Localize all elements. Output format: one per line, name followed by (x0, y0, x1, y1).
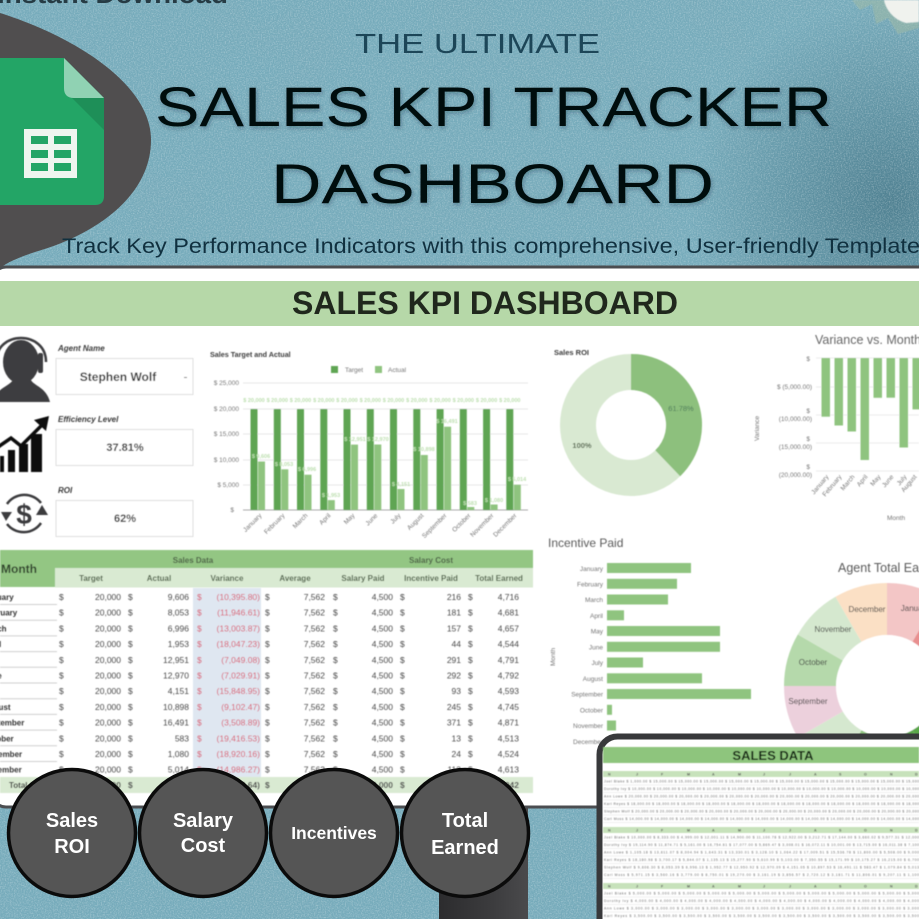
chart: incentive paid: October (580, 708, 604, 714)
chart: sales target and actual: September (421, 512, 449, 540)
tablet spreadsheet rows: Dorothy Ivy $ 10,000.00 $ 10,000.00 $ 10,000.00 $ 10,000.00 $ 10,000.00 $ 10,000.00 $ 10,000.00 $ 10,000.00 $ 10,000.00 $ 10,000.00 $ 10,000.00 $ 10,000 (604, 787, 919, 791)
table: sales and salary data: 57,042 (493, 780, 519, 790)
table: sales and salary data: 4,745 (498, 702, 519, 712)
chart: sales target and actual: $ 12,970 (367, 437, 389, 443)
panel: monitor screen (0, 267, 919, 807)
table: sales and salary data: $$$$$$ (59, 780, 473, 790)
dashboard header band (0, 281, 919, 326)
tablet spreadsheet rows: Joel Blake $ 5,000.00 $ 5,000.00 $ 5,000.00 $ 5,000.00 $ 5,000.00 $ 5,000.00 $ 5,000.00 $ 5,000.00 $ 5,000.00 $ 5,000.00 $ 5,000.00 $ 5,000 (604, 892, 919, 896)
label: efficiency level: Efficiency Level (58, 415, 119, 424)
chart: sales target and actual: $ 20,000 (290, 398, 311, 404)
tablet spreadsheet rows: NJFMAMJJASOND (608, 828, 918, 832)
chart: sales target and actual: $ 20,000 (476, 398, 497, 404)
chart: incentive paid: December (573, 739, 604, 746)
chart: incentive paid: Month (550, 648, 557, 666)
table: sales and salary data: 4,657 (498, 623, 519, 633)
table: sales and salary data: 4,500 (372, 623, 393, 633)
tablet spreadsheet rows: NJFMAMJJASOND (608, 772, 918, 776)
roi value box (56, 500, 193, 536)
tablet device (600, 736, 919, 919)
chart: sales target and actual: $ 12,951 (344, 437, 366, 443)
table: sales and salary data: $ (197, 749, 202, 759)
table: sales and salary data: $$$$$$ (59, 608, 473, 618)
badge: incentives: Incentives (291, 823, 377, 843)
tablet spreadsheet rows: Dorothy Ivy $ 4,000.00 $ 4,000.00 $ 4,000.00 $ 4,000.00 $ 4,000.00 $ 4,000.00 $ 4,000.00 $ 4,000.00 $ 4,000.00 $ 4,000.00 $ 4,000.00 $ 4,000 (604, 899, 919, 903)
table: sales and salary data: (13,003.87) (217, 623, 260, 633)
table: sales and salary data: 371 (447, 718, 461, 728)
table: sales and salary data: 7,562 (304, 702, 325, 712)
chart: agent total earned donut: September (788, 697, 828, 706)
chart: sales target and actual: $ 20,000 (499, 398, 521, 404)
chart: variance vs month: April (856, 473, 870, 488)
chart: sales target and actual: $ 1,080 (485, 498, 503, 504)
table: sales and salary data: $ (197, 718, 202, 728)
table: sales and salary data: $$$$$$ (59, 686, 473, 696)
table: sales and salary data: 4,500 (372, 718, 393, 728)
table: sales and salary data: 4,500 (372, 686, 393, 696)
chart: sales target and actual: $ 15,000 (214, 431, 239, 438)
table: sales and salary data: 4,500 (372, 655, 393, 665)
table: sales and salary data: $$$$$$ (59, 655, 473, 665)
chart: sales target and actual: $ 20,000 (360, 398, 381, 404)
tablet spreadsheet rows: Ann Lowe $ 20,000.00 $ 20,000.00 $ 20,000.00 $ 20,000.00 $ 20,000.00 $ 20,000.00 $ 20,000.00 $ 20,000.00 $ 20,000.00 $ 20,000.00 $ 20,000.00 $ 20,000 (604, 794, 919, 798)
table: sales and salary data: 4,513 (498, 733, 519, 743)
badge: total earned (402, 770, 528, 896)
table: sales and salary data: 1,080 (168, 749, 189, 759)
title: the ultimate: THE ULTIMATE (355, 28, 600, 59)
chart: variance vs month: $ (806, 464, 810, 471)
chart: sales target and actual: $ 5,000 (217, 482, 239, 489)
table: sales and salary data: 4,500 (372, 702, 393, 712)
table: sales and salary data: 7,562 (304, 608, 325, 618)
table: sales and salary data: $$$$$$ (59, 623, 473, 633)
table: sales and salary data: 44 (452, 639, 461, 649)
efficiency value box: 37.81% (106, 442, 144, 454)
table: sales and salary data: (10,395.80) (217, 592, 260, 602)
agent name dropdown (56, 358, 193, 394)
table: sales and salary data: 12,970 (163, 670, 189, 680)
chart: agent total earned donut: October (799, 658, 828, 667)
badge: salary cost (140, 770, 266, 896)
chart: sales target and actual: $ 20,000 (406, 398, 428, 404)
table: sales and salary data: Month (1, 562, 37, 576)
chart: variance vs month: March (840, 473, 857, 492)
label: agent name: Agent Name (57, 344, 105, 353)
tablet spreadsheet rows: Stephen Wolf $ 9,606.30 $ 8,053.39 $ 6,996.13 $ 1,952.77 $ 12,950.92 $ 12,970.09 $ 4,151.05 $ 10,897.53 $ 16,491.11 $ 583.47 $ 1,079.84 $ 5,013 (604, 866, 919, 870)
chart: variance vs month: May (869, 473, 883, 488)
table: sales and salary data: $ (197, 639, 202, 649)
table: sales and salary data: Variance (211, 574, 244, 583)
chart: sales roi donut: 100% (572, 441, 592, 450)
table: sales and salary data: $$$$$$ (59, 749, 473, 759)
chart: sales target and actual: $ 20,000 (267, 398, 288, 404)
chart: variance vs month: February (821, 473, 844, 498)
table: sales and salary data: 7,562 (304, 765, 325, 775)
chart: sales target and actual: $ 8,053 (275, 462, 293, 468)
table: sales and salary data: 4,681 (498, 608, 519, 618)
label: roi: ROI (58, 486, 73, 495)
chart: sales target and actual: $ 9,606 (252, 454, 270, 460)
table: sales and salary data: 9,606 (168, 592, 189, 602)
title: dashboard: DASHBOARD (271, 152, 714, 215)
chart: sales target and actual: $ 20,000 (313, 398, 335, 404)
table: sales and salary data: 291 (447, 655, 461, 665)
table: sales and salary data: 20,000 (95, 733, 121, 743)
chart: sales target and actual: $ 16,491 (436, 419, 458, 425)
chart: variance vs month: (15,000.00) (779, 444, 812, 451)
table: sales and salary data: 4,151 (168, 686, 189, 696)
table: sales and salary data: (19,416.53) (217, 733, 260, 743)
table: sales and salary data: 20,000 (95, 608, 121, 618)
chart: incentive paid: June (589, 644, 603, 652)
chart: sales target and actual: January (242, 512, 264, 534)
table: sales and salary data: $$$$$$ (59, 639, 473, 649)
table: sales and salary data: 245 (447, 702, 461, 712)
badge: total earned: Total (442, 810, 488, 832)
table: sales and salary data: 24 (452, 749, 461, 759)
table: sales and salary data: 4,544 (498, 639, 519, 649)
chart: sales target and actual: August (406, 512, 426, 532)
table: sales and salary data: 90,746 (299, 780, 325, 790)
table: sales and salary data: 7,562 (304, 623, 325, 633)
table: sales and salary data: Average (279, 574, 311, 583)
table: sales and salary data: 4,500 (372, 765, 393, 775)
table: sales and salary data: Target (79, 574, 103, 583)
chart: sales target and actual: July (389, 512, 403, 526)
chart: sales target and actual: December (492, 512, 519, 539)
chart: incentive paid: Incentive Paid (548, 536, 623, 550)
table: sales and salary data: 20,000 (95, 702, 121, 712)
table: sales and salary data: 4,791 (498, 655, 519, 665)
table: sales and salary data: 20,000 (95, 592, 121, 602)
grey badge behind spreadsheet icon (0, 13, 151, 268)
tablet spreadsheet rows: Dorothy Ivy $ 19,114.90 $ 11,874.71 $ 5,161.00 $ 16,754.61 $ 17,077.00 $ 5,869.47 $ 3,008.01 $ 16,072.11 $ 10,001.00 $ 13,715.00 $ 16,011.38 $ 7,100 (604, 843, 919, 847)
chart: variance vs month (754, 333, 919, 522)
table: sales and salary data: 20,000 (95, 655, 121, 665)
table: sales and salary data: 12,951 (163, 655, 189, 665)
table: sales and salary data: 7,562 (304, 718, 325, 728)
sales data header band (603, 747, 919, 763)
chart: agent total earned donut: December (849, 605, 886, 614)
chart: incentive paid (548, 536, 751, 746)
chart: sales target and actual: March (292, 512, 310, 530)
icon: flower corner decoration (852, 0, 919, 34)
icon: agent with headset (0, 338, 50, 402)
badge: salary cost: Cost (181, 835, 226, 857)
table: sales and salary data: 4,792 (498, 670, 519, 680)
table: sales and salary data: 20,000 (95, 718, 121, 728)
chart: variance vs month: $ (5,000.00) (777, 384, 812, 391)
chart: incentive paid: July (591, 660, 604, 667)
chart: sales target and actual: $ 20,000 (214, 406, 239, 413)
table: sales and salary data: 181 (447, 608, 461, 618)
icon: growth chart (0, 416, 49, 472)
chart: variance vs month: $ (806, 356, 810, 363)
table: sales and salary data: 90,746 (163, 780, 189, 790)
chart: incentive paid: May (591, 628, 604, 636)
chart: variance vs month: (10,000.00) (779, 416, 812, 423)
table: sales and salary data: (15,848.95) (217, 686, 260, 696)
table: sales and salary data: 7,562 (304, 655, 325, 665)
chart: agent total earned donut: November (815, 625, 852, 634)
table: sales and salary data: 1,953 (168, 639, 189, 649)
chart: sales target and actual: October (451, 512, 473, 534)
chart: sales target and actual: $ 20,000 (453, 398, 474, 404)
chart: incentive paid: September (571, 692, 604, 698)
tablet spreadsheet rows: Joel Blake $ 1,000.00 $ 15,000.00 $ 15,000.00 $ 15,000.00 $ 15,000.00 $ 15,000.00 $ 15,000.00 $ 15,000.00 $ 15,000.00 $ 15,000.00 $ 15,000.00 $ 15,000 (604, 780, 919, 784)
chart: sales target and actual: $ (230, 507, 234, 514)
table: sales and salary data: (3,508.89) (221, 718, 260, 728)
chart: incentive paid: March (585, 597, 603, 604)
table: sales and salary data: $ (197, 733, 202, 743)
tablet spreadsheet rows: Karl Reyes $ 18,000.00 $ 18,000.00 $ 18,000.00 $ 18,000.00 $ 18,000.00 $ 18,000.00 $ 18,000.00 $ 18,000.00 $ 18,000.00 $ 18,000.00 $ 18,000.00 $ 18,000 (604, 802, 919, 806)
chart: sales target and actual: April (318, 512, 333, 527)
table: sales and salary data: 4,716 (498, 592, 519, 602)
table: sales and salary data: $$$$$$ (59, 765, 473, 775)
table: sales and salary data: 10,898 (163, 702, 189, 712)
chart: sales target and actual: $ 20,000 (429, 398, 451, 404)
table: sales and salary data: (18,047.23) (217, 639, 260, 649)
badge: sales roi: Sales (46, 810, 98, 832)
table: sales and salary data: 7,562 (304, 670, 325, 680)
chart: sales target and actual: $ 20,000 (336, 398, 358, 404)
table: sales and salary data: (7,049.08) (221, 655, 260, 665)
table: sales and salary data: $$$$$$ (59, 733, 473, 743)
tablet spreadsheet rows: Joel Blake $ 10,000.00 $ 8,333.00 $ 4,999.00 $ 12,001.11 $ 14,900.00 $ 11,100.78 $ 12,922.00 $ 3,212.71 $ 17,144.00 $ 3,660.02 $ 9,577.31 $ 12,000 (604, 836, 919, 840)
tablet spreadsheet rows: Carl Moss $ 5,971.15 $ 3,560.16 $ 3,779.00 $ 8,750.01 $ 19,270.00 $ 3,161.19 $ 3,856.57 $ 2,720.12 $ 3,181.71 $ 11,806.01 $ 9,207.11 $ 1,100 (604, 873, 919, 877)
chart: variance vs month: $ (806, 436, 810, 443)
chart: sales target and actual: $ 25,000 (214, 380, 239, 387)
table: sales and salary data: (11,946.61) (217, 608, 260, 618)
table: sales and salary data: Incentive Paid (404, 574, 458, 583)
table: sales and salary data: 54,000 (367, 780, 393, 790)
chart: incentive paid: April (590, 613, 604, 620)
chart: sales roi donut: Sales ROI (554, 348, 589, 357)
table: sales and salary data: (149,253.64) (212, 780, 260, 790)
chart: sales target and actual: $ 10,898 (413, 447, 435, 453)
chart: sales target and actual: $ 6,996 (298, 467, 316, 473)
chart: sales target and actual: $ 20,000 (243, 398, 265, 404)
sales data header band: SALES DATA (732, 748, 814, 763)
table: sales and salary data: $ (197, 765, 202, 775)
table: sales and salary data: (9,102.47) (221, 702, 260, 712)
table: sales and salary data: 4,871 (498, 718, 519, 728)
table: sales and salary data: Salary Cost (409, 556, 453, 565)
roi value box: 62% (114, 513, 136, 525)
tablet spreadsheet rows: Ann Lowe $ 3,000.00 $ 3,000.00 $ 3,000.00 $ 3,000.00 $ 3,000.00 $ 3,000.00 $ 3,000.00 $ 3,000.00 $ 3,000.00 $ 3,000.00 $ 3,000.00 $ 3,000 (604, 906, 919, 910)
tablet spreadsheet rows: Ann Lowe $ 1,105.18 $ 13,611.07 $ 8,004.94 $ 1,643.31 $ 13,330.01 $ 3,128.10 $ 1,064.22 $ 17,009.51 $ 15,536.78 $ 11,800.00 $ 5,508.00 $ 9,000 (604, 850, 919, 854)
table: sales and salary data: 93 (452, 686, 461, 696)
chart: variance vs month: January (810, 473, 831, 496)
icon: dollar cycle (1, 495, 48, 532)
tablet spreadsheet rows: Karl Reyes $ 3,500.00 $ 3,500.00 $ 3,500.00 $ 3,500.00 $ 3,500.00 $ 3,500.00 $ 3,500.00 $ 3,500.00 $ 3,500.00 $ 3,500.00 $ 3,500.00 $ 3,500 (604, 914, 919, 918)
chart: variance vs month: $ (806, 408, 810, 415)
table: sales and salary data: 20,000 (95, 623, 121, 633)
chart: sales target and actual: $ 5,014 (508, 477, 527, 483)
table: sales and salary data: 7,562 (304, 733, 325, 743)
table: sales and salary data: 20,000 (95, 749, 121, 759)
chart: variance vs month: Variance (754, 415, 761, 441)
chart: incentive paid: January (580, 566, 604, 573)
table: sales and salary data: 292 (447, 670, 461, 680)
chart: sales target and actual: $ 10,000 (214, 457, 239, 464)
table header bands (0, 550, 533, 793)
table: sales and salary data: 7,562 (304, 749, 325, 759)
table: sales and salary data: 216 (447, 592, 461, 602)
chart: sales roi donut: 61.78% (668, 404, 694, 413)
table: sales and salary data: 4,613 (498, 765, 519, 775)
badge: sales roi (8, 770, 136, 896)
table: sales and salary data: 583 (175, 733, 189, 743)
table: sales and salary data: 240,000 (90, 780, 121, 790)
table: sales and salary data: $ (197, 702, 202, 712)
table: sales and salary data: 2,042 (440, 780, 461, 790)
table: sales and salary data: $ (197, 592, 202, 602)
table: sales and salary data: $ (197, 608, 202, 618)
table: sales and salary data: 4,500 (372, 733, 393, 743)
table: sales and salary data: $$$$$$ (59, 592, 473, 602)
badge: salary cost: Salary (173, 810, 234, 832)
table: sales and salary data: 4,500 (372, 749, 393, 759)
table: sales and salary data: 20,000 (95, 670, 121, 680)
badge: sales roi: ROI (54, 836, 90, 858)
table: sales and salary data: 4,500 (372, 639, 393, 649)
chart: sales target and actual: June (364, 512, 380, 527)
table: sales and salary data: Salary Paid (341, 574, 385, 583)
table: sales and salary data: 4,500 (372, 592, 393, 602)
badge: total earned: Earned (431, 837, 499, 859)
chart: sales target and actual (210, 350, 528, 540)
chart: variance vs month: June (881, 474, 896, 489)
icon: dollar cycle: $ (16, 499, 32, 530)
table: sales and salary data: 4,524 (498, 749, 519, 759)
table: sales and salary data: 6,996 (168, 623, 189, 633)
table: sales and salary data: Total Earned (475, 574, 523, 583)
table: sales and salary data: 5,014 (168, 765, 189, 775)
chart: sales target and actual: February (263, 512, 287, 536)
table: sales and salary data: 16,491 (163, 718, 189, 728)
chart: sales target and actual: $ 1,953 (322, 493, 340, 499)
table: sales and salary data: $ (197, 686, 202, 696)
chart: sales target and actual: Actual (388, 367, 407, 374)
chart: sales target and actual: November (469, 512, 496, 539)
monitor stand (439, 805, 528, 919)
chart: incentive paid: November (573, 723, 604, 730)
table: sales and salary data: 20,000 (95, 765, 121, 775)
table: sales and salary data: 113 (447, 765, 461, 775)
tablet spreadsheet rows: NJFMAMJJASOND (608, 884, 918, 888)
chart: sales target and actual: Sales Target and Actual (210, 350, 291, 359)
table: sales and salary data: 7,562 (304, 686, 325, 696)
table: sales and salary data: (14,986.27) (217, 765, 260, 775)
subtitle: Track Key Performance Indicators with this comprehensive, User-friendly Template (62, 235, 919, 258)
chart: variance vs month: August (900, 474, 919, 494)
table: sales and salary data: $$$$$$ (59, 718, 473, 728)
table: sales and salary data: Actual (147, 574, 171, 583)
badge: incentives (270, 770, 398, 896)
chart: incentive paid: February (577, 582, 604, 588)
chart: sales target and actual: Target (345, 367, 363, 374)
table: sales and salary data: $ (197, 670, 202, 680)
chart: agent total earned donut (784, 561, 919, 789)
table: sales and salary data: 157 (447, 623, 461, 633)
tablet spreadsheet rows: Karl Reyes $ 18,180.98 $ 3,700.17 $ 5,844.07 $ 1,135.13 $ 15,277.90 $ 5,610.99 $ 5,103.00 $ 7,350.55 $ 15,171.99 $ 10,175.27 $ 16,215.00 $ 6,700 (604, 858, 919, 862)
table: sales and salary data: (7,029.91) (221, 670, 260, 680)
table: sales and salary data: 8,053 (168, 608, 189, 618)
table: sales and salary data: Sales Data (173, 556, 214, 565)
chart: sales target and actual: $ 583 (463, 501, 477, 507)
icon: google sheets file (0, 58, 104, 205)
table: sales and salary data: 20,000 (95, 686, 121, 696)
title: sales kpi tracker: SALES KPI TRACKER (155, 75, 832, 138)
agent name dropdown: Stephen Wolf (80, 370, 157, 384)
chart: sales target and actual: $ 4,151 (392, 482, 410, 488)
chart: incentive paid: August (583, 676, 603, 683)
table: sales and salary data: 4,593 (498, 686, 519, 696)
tablet spreadsheet rows (603, 771, 919, 918)
table: sales and salary data: $ (197, 655, 202, 665)
table: sales and salary data: 7,562 (304, 592, 325, 602)
table: sales and salary data: $$$$$$ (59, 670, 473, 680)
chart: variance vs month: (20,000.00) (779, 472, 812, 479)
table: sales and salary data: $$$$$$ (59, 702, 473, 712)
table: sales and salary data: Total (9, 781, 28, 790)
table: sales and salary data: 4,500 (372, 670, 393, 680)
table: sales and salary data: 7,562 (304, 639, 325, 649)
tablet spreadsheet rows: Stephen Wolf $ 20,000.00 $ 20,000.00 $ 20,000.00 $ 20,000.00 $ 20,000.00 $ 20,000.00 $ 20,000.00 $ 20,000.00 $ 20,000.00 $ 20,000.00 $ 20,000.00 $ 20,000 (604, 810, 919, 814)
dashboard header band: SALES KPI DASHBOARD (292, 285, 678, 321)
efficiency value box (56, 430, 193, 466)
chart: variance vs month: Month (887, 515, 905, 522)
table: sales and salary data: 20,000 (95, 639, 121, 649)
table: sales and salary data: $ (197, 623, 202, 633)
tablet spreadsheet rows: Carl Moss $ 14,000.00 $ 14,000.00 $ 14,000.00 $ 14,000.00 $ 14,000.00 $ 14,000.00 $ 14,000.00 $ 14,000.00 $ 14,000.00 $ 14,000.00 $ 14,000.00 $ 14,000 (604, 817, 919, 821)
chart: sales roi donut (554, 348, 702, 478)
chart: variance vs month: Variance vs. Month (815, 333, 919, 347)
table: sales and salary data: (18,920.16) (217, 749, 260, 759)
chart: sales target and actual: $ 20,000 (383, 398, 404, 404)
table: sales and salary data: 13 (452, 733, 461, 743)
chart: variance vs month: July (896, 473, 909, 487)
chart: sales target and actual: May (343, 512, 357, 526)
table: sales and salary data (0, 550, 533, 793)
table: sales and salary data: 4,500 (372, 608, 393, 618)
